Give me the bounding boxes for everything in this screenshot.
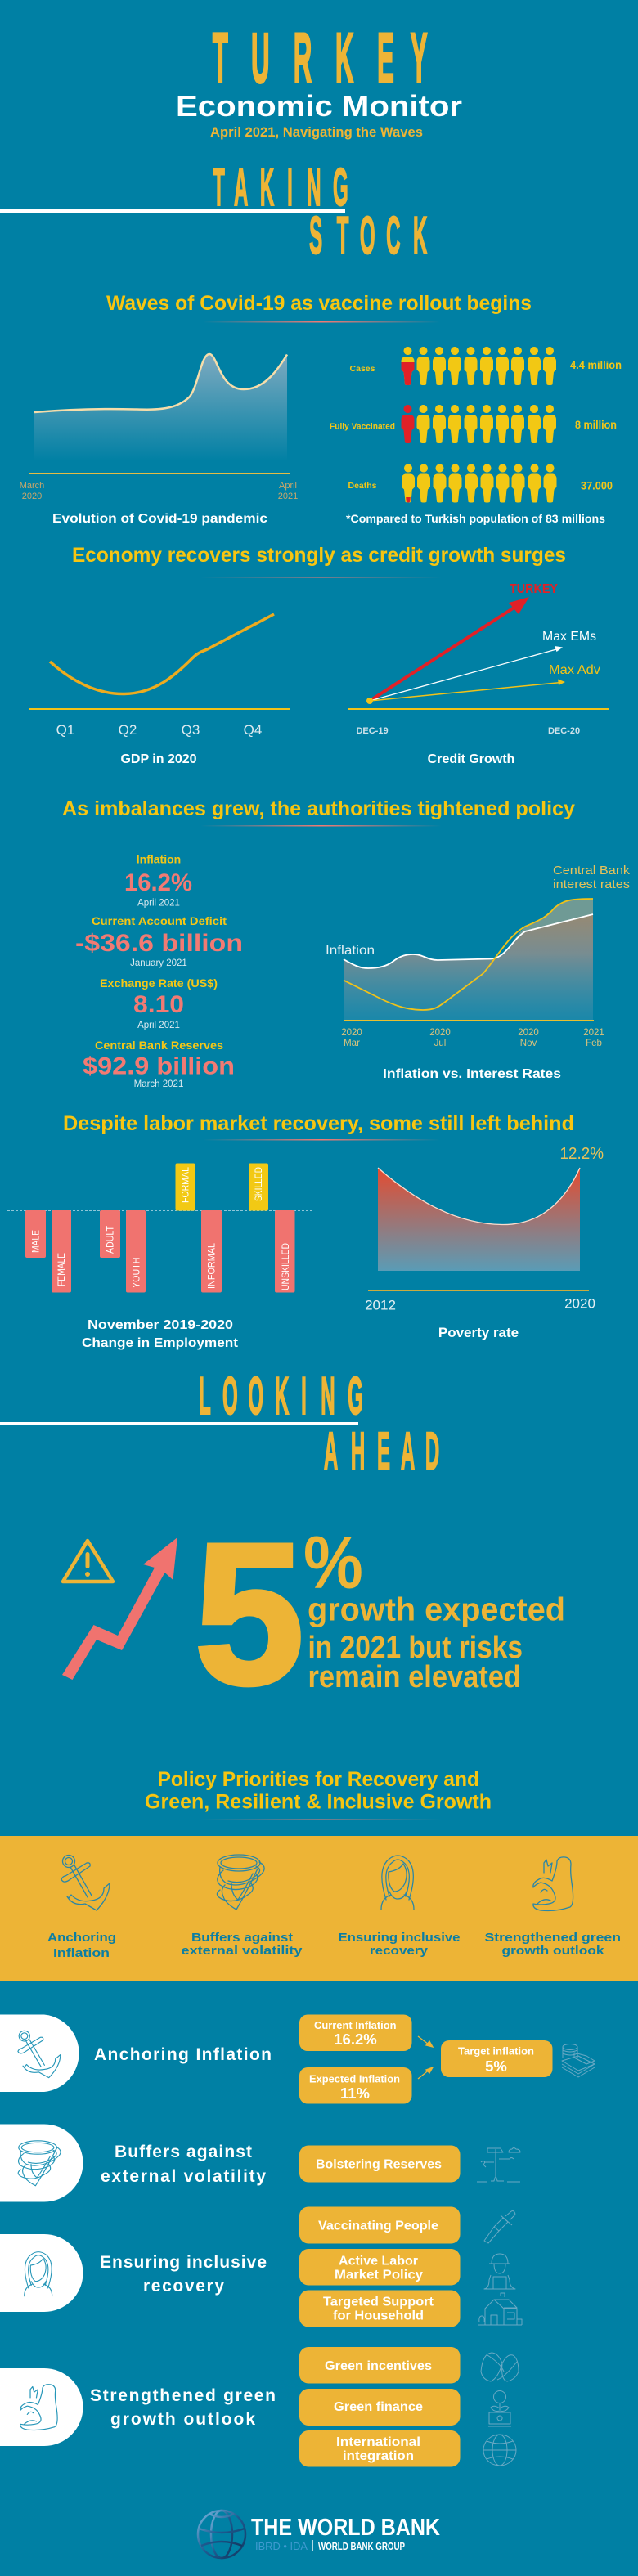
box: green incentives <box>299 2347 460 2383</box>
box: active labor market policy: Market Policy <box>335 2269 423 2282</box>
label <box>100 2253 267 2296</box>
label: buffers: external volatility <box>182 1944 303 1958</box>
label: anchoring inflation <box>47 1931 116 1960</box>
chart: inflation vs interest rates: Nov <box>520 1039 537 1048</box>
label: ensuring: Ensuring inclusive <box>339 1931 460 1945</box>
stat: inflation <box>124 852 192 908</box>
box: bolstering reserves: Bolstering Reserves <box>316 2157 442 2172</box>
chart: change in employment: INFORMAL <box>208 1242 218 1289</box>
stat: exchange rate <box>100 976 218 1030</box>
box: expected inflation <box>299 2067 412 2103</box>
section heading: Looking Ahead: LOOKING <box>199 1367 363 1426</box>
label: ensuring <box>339 1931 460 1958</box>
box: green finance: Green finance <box>334 2400 423 2414</box>
box: green finance <box>299 2389 460 2426</box>
pictogram: fully vaccinated <box>330 405 617 443</box>
icon: globe <box>483 2435 516 2466</box>
chart: change in employment: UNSKILLED <box>281 1243 291 1290</box>
heading: Covid-19: Waves of Covid-19 as vaccine rollout begins <box>106 292 532 315</box>
chart: inflation vs interest rates: Jul <box>434 1039 446 1048</box>
chart: credit growth: DEC-20 <box>548 726 580 736</box>
chart: GDP in 2020 <box>29 614 290 766</box>
stat: current account deficit: January 2021 <box>130 958 187 968</box>
chart: credit growth: TURKEY <box>510 582 558 596</box>
chart: GDP in 2020: Q1 <box>56 722 74 738</box>
pictogram: fully vaccinated: Fully Vaccinated <box>330 422 395 432</box>
stat: current account deficit: Current Account Deficit <box>92 914 227 927</box>
label: Buffers against <box>115 2143 252 2161</box>
label: strengthened: Strengthened green <box>484 1931 621 1945</box>
label: Strengthened green <box>90 2386 276 2405</box>
chart: GDP in 2020: Q3 <box>182 722 200 738</box>
chart: inflation vs interest rates: interest rates <box>553 877 630 891</box>
chart: change in employment: November 2019-2020 <box>88 1318 233 1332</box>
icon: arm <box>533 1857 573 1910</box>
stat: exchange rate: 8.10 <box>133 991 184 1018</box>
heading: economy recovers: Economy recovers strongly as credit growth surges <box>72 544 566 567</box>
chart: inflation vs interest rates: Inflation vs. Interest Rates <box>383 1067 561 1081</box>
icon: hammer and wrench <box>477 2147 520 2182</box>
tab with woman icon <box>0 2234 83 2312</box>
heading: policy priorities: Green, Resilient & Inclusive Growth <box>145 1791 492 1814</box>
chart: inflation vs interest rates <box>326 864 631 1081</box>
chart: evolution of Covid-19 pandemic: April <box>279 481 297 491</box>
tab with tornado icon <box>0 2125 83 2201</box>
chart: inflation vs interest rates: Mar <box>344 1039 360 1048</box>
chart: inflation vs interest rates: 2020 <box>341 1028 362 1038</box>
box: targeted support for household: Targeted Support <box>323 2295 434 2309</box>
chart: change in employment: SKILLED <box>254 1167 264 1201</box>
pictogram: cases: 4.4 million <box>570 358 622 371</box>
label: anchoring inflation: Inflation <box>53 1946 110 1960</box>
row: anchoring inflation <box>0 2015 595 2103</box>
chart: credit growth: DEC-19 <box>356 726 389 736</box>
chart: change in employment: MALE <box>31 1230 41 1253</box>
panel: policy priorities band <box>0 1836 638 1981</box>
label: external volatility <box>101 2167 266 2186</box>
chart: evolution of Covid-19 pandemic: 2020 <box>22 491 42 501</box>
icon: tornado <box>217 1855 264 1910</box>
stat: inflation: Inflation <box>137 852 181 865</box>
label: growth outlook <box>110 2410 255 2429</box>
chart: poverty rate: 12.2% <box>559 1145 604 1163</box>
heading: policy priorities <box>145 1768 492 1820</box>
growth forecast text <box>308 1591 565 1694</box>
logo: The World Bank <box>198 2511 440 2558</box>
chart: GDP in 2020: GDP in 2020 <box>120 752 197 766</box>
section heading: Looking Ahead <box>0 1367 439 1481</box>
stat: inflation: 16.2% <box>124 869 192 896</box>
box: expected inflation: Expected Inflation <box>309 2074 400 2085</box>
chart: poverty rate <box>365 1145 604 1340</box>
row: strengthened green growth outlook <box>0 2347 519 2466</box>
big number: 5% <box>195 1502 363 1726</box>
chart: credit growth: Credit Growth <box>428 752 514 766</box>
label: strengthened <box>484 1931 621 1958</box>
icon: anchor <box>61 1855 110 1910</box>
box: current inflation <box>299 2015 412 2051</box>
icon: syringe <box>484 2211 515 2243</box>
chart: poverty rate: 2020 <box>564 1295 595 1312</box>
chart: poverty rate: Poverty rate <box>438 1325 519 1340</box>
label: Anchoring Inflation <box>94 2045 272 2064</box>
title: Turkey: TURKEY <box>213 18 427 97</box>
box: bolstering reserves <box>299 2146 460 2182</box>
chart: change in employment: FORMAL <box>182 1166 191 1203</box>
box: vaccinating people: Vaccinating People <box>318 2219 438 2233</box>
heading: labor market: Despite labor market recovery, some still left behind <box>63 1112 574 1135</box>
icon: house <box>478 2293 522 2325</box>
chart: inflation vs interest rates: Feb <box>586 1039 602 1048</box>
arrows to target <box>418 2036 433 2079</box>
box: target inflation: Target inflation <box>458 2046 534 2058</box>
section heading: Looking Ahead: AHEAD <box>324 1422 439 1481</box>
footnote: *Compared to Turkish population of 83 millions <box>346 512 605 525</box>
box: target inflation: 5% <box>485 2058 507 2075</box>
chart: evolution of Covid-19 pandemic <box>20 354 298 526</box>
label: Ensuring inclusive <box>100 2253 267 2272</box>
chart: change in employment: Change in Employment <box>82 1336 239 1350</box>
pictogram: cases: Cases <box>350 364 375 374</box>
tab with anchor icon <box>0 2015 79 2092</box>
chart: poverty rate: 2012 <box>365 1297 396 1313</box>
pictogram: deaths <box>348 464 613 502</box>
icon: coins and notes <box>562 2044 595 2077</box>
chart: change in employment <box>7 1163 314 1350</box>
box: green incentives: Green incentives <box>325 2359 432 2373</box>
label: ensuring: recovery <box>370 1944 429 1958</box>
box: targeted support for household <box>299 2290 460 2327</box>
icon: green finance <box>488 2391 511 2426</box>
stat: exchange rate: April 2021 <box>137 1021 180 1030</box>
label <box>101 2143 266 2186</box>
logo: The World Bank: IBRD • IDA <box>255 2540 308 2552</box>
pictogram: fully vaccinated: 8 million <box>575 418 617 431</box>
chart: inflation vs interest rates: Central Bank <box>553 864 631 877</box>
big number: 5%: % <box>303 1522 363 1604</box>
stat: inflation: April 2021 <box>137 898 180 908</box>
tab with arm icon <box>0 2368 83 2446</box>
pictogram: deaths: 37.000 <box>581 479 613 492</box>
icon: worker <box>484 2254 515 2289</box>
subtitle: Economic Monitor: Economic Monitor <box>176 89 462 123</box>
box: active labor market policy: Active Labor <box>339 2254 418 2269</box>
chart: evolution of Covid-19 pandemic: 2021 <box>278 491 298 501</box>
box: current inflation: 16.2% <box>334 2031 377 2048</box>
chart: credit growth: Max EMs <box>542 630 596 644</box>
box: international integration: integration <box>343 2449 414 2463</box>
label: strengthened: growth outlook <box>502 1944 604 1958</box>
stat: current account deficit: -$36.6 billion <box>75 930 243 957</box>
box: vaccinating people <box>299 2206 460 2244</box>
chart: credit growth <box>348 582 609 766</box>
pictogram: cases <box>350 347 622 385</box>
box: active labor market policy <box>299 2249 460 2285</box>
date line: April 2021, Navigating the Waves <box>210 124 423 140</box>
chart: GDP in 2020: Q2 <box>119 722 137 738</box>
chart: change in employment: ADULT <box>106 1226 116 1254</box>
stat: central bank reserves <box>83 1039 235 1089</box>
icon: rising arrow <box>62 1537 177 1680</box>
logo: The World Bank: THE WORLD BANK <box>251 2515 440 2541</box>
stat: current account deficit <box>75 914 243 968</box>
box: current inflation: Current Inflation <box>314 2020 396 2031</box>
growth forecast text: growth expected <box>308 1591 565 1627</box>
label: buffers: Buffers against <box>191 1931 293 1945</box>
row: ensuring inclusive recovery <box>0 2206 522 2327</box>
stat: exchange rate: Exchange Rate (US$) <box>100 976 218 990</box>
box: target inflation <box>441 2040 553 2077</box>
stat: central bank reserves: March 2021 <box>134 1079 183 1089</box>
logo: The World Bank: WORLD BANK GROUP <box>318 2541 405 2552</box>
row: buffers against external volatility <box>0 2125 520 2201</box>
growth forecast text: remain elevated <box>308 1660 521 1694</box>
box: international integration <box>299 2430 460 2466</box>
chart: change in employment: YOUTH <box>133 1258 142 1288</box>
label: recovery <box>143 2277 224 2296</box>
section heading: Taking Stock: TAKING <box>213 159 348 218</box>
section heading: Taking Stock <box>0 159 427 266</box>
box: expected inflation: 11% <box>340 2085 370 2102</box>
icon: warning triangle <box>63 1541 113 1582</box>
big number: 5%: 5 <box>195 1502 304 1726</box>
label: anchoring inflation: Anchoring <box>47 1931 116 1945</box>
growth forecast text: in 2021 but risks <box>308 1631 523 1665</box>
chart: inflation vs interest rates: 2021 <box>583 1028 604 1038</box>
chart: GDP in 2020: Q4 <box>244 722 262 738</box>
section heading: Taking Stock: STOCK <box>309 207 427 266</box>
chart: inflation vs interest rates: 2020 <box>518 1028 539 1038</box>
chart: evolution of Covid-19 pandemic: March <box>20 481 44 491</box>
box: targeted support for household: for Household <box>333 2309 424 2322</box>
label <box>90 2386 276 2429</box>
chart: change in employment: FEMALE <box>57 1253 67 1286</box>
stat: central bank reserves: Central Bank Reserves <box>95 1039 223 1052</box>
heading: imbalances: As imbalances grew, the authorities tightened policy <box>62 797 575 820</box>
icon: woman <box>381 1856 414 1910</box>
box: international integration: International <box>336 2435 420 2449</box>
heading: policy priorities: Policy Priorities for Recovery and <box>157 1768 479 1791</box>
label: buffers <box>182 1931 303 1958</box>
stat: central bank reserves: $92.9 billion <box>83 1053 235 1079</box>
pictogram: deaths: Deaths <box>348 481 377 491</box>
chart: inflation vs interest rates: 2020 <box>429 1028 451 1038</box>
chart: evolution of Covid-19 pandemic: Evolution of Covid-19 pandemic <box>52 512 267 526</box>
chart: credit growth: Max Adv <box>549 663 600 677</box>
chart: inflation vs interest rates: Inflation <box>326 944 375 958</box>
icon: green incentives <box>481 2353 519 2381</box>
